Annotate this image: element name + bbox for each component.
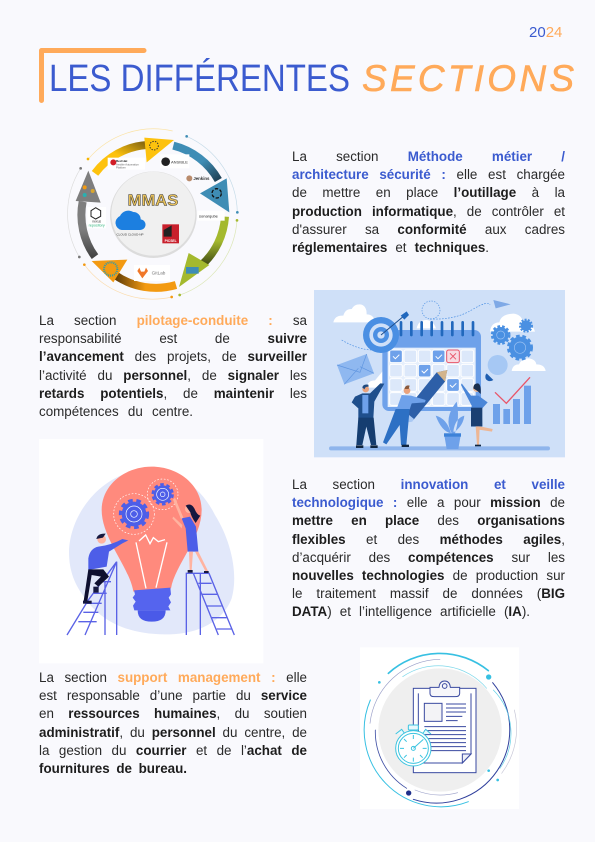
Picsel logo: PICSEL xyxy=(165,239,177,243)
text: innovation et veille: flexibles et des méthodes agiles, xyxy=(292,532,565,547)
illustration: light bulb teamwork xyxy=(66,466,235,636)
bar chart xyxy=(493,377,531,424)
text: support management: en ressources humaines, du soutien xyxy=(39,706,307,721)
title: LES DIFFÉRENTES xyxy=(49,57,350,100)
tool logos: Red Hat xyxy=(116,159,127,163)
text: pilotage-conduite: l’activité du personnel, de signaler les xyxy=(39,368,307,383)
text: pilotage-conduite: compétences du centre. xyxy=(39,404,193,419)
arc segments xyxy=(81,145,225,288)
title bracket xyxy=(39,48,146,103)
text: Méthode métier xyxy=(292,149,565,255)
cloud logo xyxy=(116,211,146,237)
Picsel logo xyxy=(162,224,179,243)
bulb glass xyxy=(102,467,202,592)
MMAS label: MMAS xyxy=(128,193,178,210)
text: Méthode métier: La section Méthode métier / xyxy=(292,149,565,164)
illustration: planning calendar xyxy=(314,290,565,458)
text: support management: est responsable d’une partie du service xyxy=(39,688,307,703)
tool logos: nexus xyxy=(92,220,101,224)
tool logos xyxy=(87,154,225,281)
centre disc xyxy=(110,171,197,258)
paper plane xyxy=(493,300,511,308)
gears xyxy=(114,479,178,534)
ladders xyxy=(67,562,234,635)
text: support management: administratif, du personnel du centre, de xyxy=(39,725,307,740)
tool logos: ANSIBLE xyxy=(171,159,188,164)
text: innovation et veille: le traitement massif de données (BIG xyxy=(292,586,565,601)
tool logos: Jenkins xyxy=(193,176,210,181)
plant xyxy=(436,402,464,449)
text: Méthode métier: réglementaires et techniques. xyxy=(292,240,489,255)
year: 2024 xyxy=(529,24,562,41)
clouds xyxy=(333,304,546,388)
text: support management: La section support management : elle xyxy=(39,670,307,685)
text: innovation et veille: La section innovation et veille xyxy=(292,477,565,492)
person right xyxy=(172,498,209,573)
bulb base xyxy=(133,588,171,622)
text: pilotage-conduite: l’avancement des projets, de surveiller xyxy=(39,349,307,364)
tool logos: GitLab xyxy=(152,271,166,276)
title xyxy=(49,57,574,100)
text: innovation et veille: DATA) et l’intelligence artificielle (IA). xyxy=(292,604,530,619)
text: innovation et veille xyxy=(292,477,565,619)
text: Méthode métier: d'assurer sa conformité aux cadres xyxy=(292,222,565,237)
light bulb xyxy=(485,355,508,381)
envelope xyxy=(337,354,374,384)
cloud logo: CLOUD CLOUD-NP xyxy=(116,233,144,237)
grey disc xyxy=(378,668,502,792)
text: support management: fournitures de bureau. xyxy=(39,761,187,776)
clipboard xyxy=(413,681,476,773)
tool logos: Platform xyxy=(116,165,127,169)
title: SECTIONS xyxy=(362,58,574,99)
text: pilotage-conduite: responsabilité est de suivre xyxy=(39,331,307,346)
calendar xyxy=(382,322,481,411)
filament xyxy=(136,535,167,588)
text: innovation et veille: d’acquérir des compétences sur les xyxy=(292,550,565,565)
text: innovation et veille: nouvelles technologies de production sur xyxy=(292,568,565,583)
text: support management xyxy=(39,670,307,776)
text: Méthode métier: architecture sécurité : elle est chargée xyxy=(292,167,565,182)
arrow icons xyxy=(150,141,158,150)
tool logos: repository xyxy=(89,224,105,228)
text: Méthode métier: de mettre en place l’outillage à la xyxy=(292,185,565,200)
stopwatch xyxy=(396,725,431,766)
text: pilotage-conduite: retards potentiels, de maintenir les xyxy=(39,386,307,401)
target xyxy=(363,311,409,353)
text: support management: la gestion du courrier et de l’achat de xyxy=(39,743,307,758)
text: innovation et veille: technologique : elle a pour mission de xyxy=(292,495,565,510)
orbit rings xyxy=(364,653,517,807)
text: Méthode métier: production informatique, de contrôler et xyxy=(292,204,565,219)
person left xyxy=(83,534,128,604)
tool logos: sonarqube xyxy=(199,213,219,218)
text: pilotage-conduite xyxy=(39,313,307,419)
text: pilotage-conduite: La section pilotage-conduite : sa xyxy=(39,313,307,328)
person right xyxy=(461,383,493,446)
illustration: clipboard and stopwatch xyxy=(364,652,517,808)
gears xyxy=(492,320,532,359)
tool logos: Ansible Automation xyxy=(116,162,139,166)
thin outer ring xyxy=(68,129,239,299)
ground xyxy=(329,446,550,450)
dashed flight path xyxy=(342,303,490,350)
person with pencil xyxy=(383,370,447,447)
background blob xyxy=(69,470,234,634)
arrow heads xyxy=(144,138,174,162)
text: innovation et veille: mettre en place des organisations xyxy=(292,513,565,528)
person left xyxy=(352,383,384,448)
illustration: MMAS cycle diagram xyxy=(67,128,239,300)
